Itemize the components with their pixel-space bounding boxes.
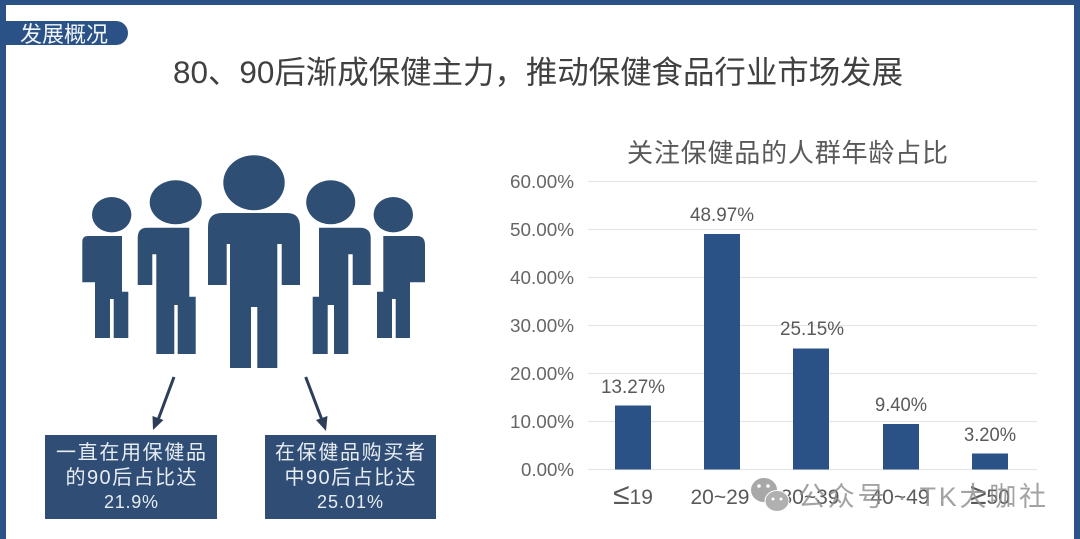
bar chart <box>510 138 1037 511</box>
person: far left <box>82 197 131 338</box>
person: inner right <box>306 180 371 354</box>
person: centre <box>208 155 300 368</box>
callout: right: 在保健品购买者 <box>275 441 425 464</box>
category labels: ≤19 <box>613 478 653 511</box>
y axis labels: 30.00% <box>510 316 574 336</box>
person: far right <box>374 197 425 338</box>
arrow: left <box>152 377 174 430</box>
data labels: 9.40% <box>875 395 927 416</box>
data labels: 3.20% <box>964 425 1016 446</box>
callout: left: 一直在用保健品 <box>56 441 206 464</box>
y axis labels <box>510 172 574 480</box>
person: inner left <box>138 180 202 354</box>
category labels: ≥50 <box>970 478 1010 511</box>
callout: right: 中90后占比达 <box>284 466 416 489</box>
data labels: 13.27% <box>601 377 665 398</box>
y axis labels: 0.00% <box>521 460 574 480</box>
data labels <box>601 205 1016 446</box>
y axis labels: 50.00% <box>510 220 574 240</box>
callout: right <box>265 435 436 519</box>
section tag: 发展概况 <box>20 22 108 47</box>
data labels: 48.97% <box>690 205 754 226</box>
data labels: 25.15% <box>780 319 844 340</box>
category labels: 20~29 <box>691 486 749 509</box>
y axis labels: 20.00% <box>510 364 574 384</box>
icon: wechat <box>751 478 789 512</box>
y axis labels: 10.00% <box>510 412 574 432</box>
y axis labels: 60.00% <box>510 172 574 192</box>
category labels <box>613 478 1010 511</box>
callout: left <box>45 435 217 519</box>
title: 80、90后渐成保健主力，推动保健食品行业市场发展 <box>173 54 903 90</box>
section tag <box>0 21 128 47</box>
callout: left: 的90后占比达 <box>66 466 196 489</box>
icon: group of five people <box>82 155 425 368</box>
callout: right: 25.01% <box>317 492 383 512</box>
y axis labels: 40.00% <box>510 268 574 288</box>
callout: left: 21.9% <box>104 492 158 512</box>
chart title: 关注保健品的人群年龄占比 <box>627 138 948 168</box>
category labels: 40~49 <box>871 486 929 509</box>
arrow: right <box>306 377 328 431</box>
watermark: 公众号 · TK大咖社 <box>798 482 1046 512</box>
category labels: 30~39 <box>781 486 839 509</box>
bars <box>615 234 1008 470</box>
